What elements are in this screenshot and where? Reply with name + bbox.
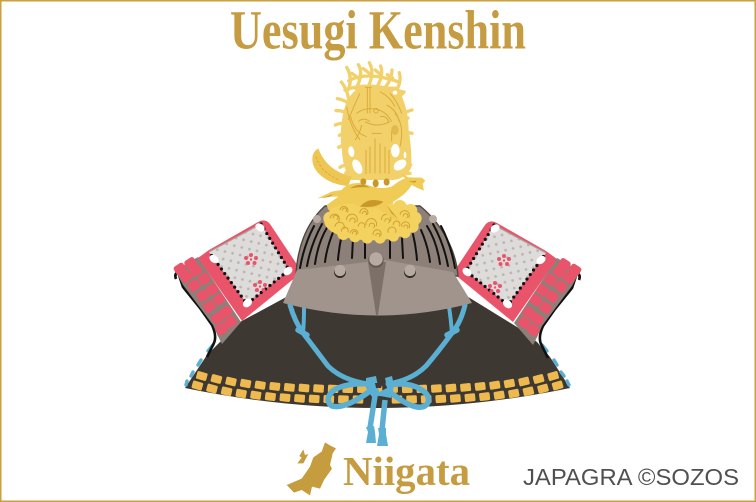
bow centre: [366, 376, 394, 398]
visor rivets: [334, 252, 416, 278]
tassels: [366, 426, 388, 446]
crest flame strands: [335, 63, 412, 176]
cloud base: [323, 197, 422, 244]
tail shading: [316, 157, 340, 181]
flap patterned panel: [208, 222, 294, 309]
knot opening: [375, 383, 383, 388]
cord bow knot: [328, 376, 429, 446]
horse: [317, 173, 425, 222]
crest ovals: [360, 178, 390, 187]
bow tails: [370, 396, 385, 430]
flap red frame: [198, 220, 302, 321]
golden crest: [312, 63, 425, 244]
helmet dome: [296, 206, 458, 276]
crest body: [341, 86, 411, 180]
visor: [283, 260, 472, 316]
right side flap: [453, 221, 582, 358]
dome ribs: [300, 224, 455, 268]
flap red squares: [173, 256, 238, 336]
bow loops: [328, 384, 370, 407]
mainland shape: [287, 442, 336, 495]
prefecture name: Niigata: [343, 448, 470, 494]
horse shading: [321, 181, 417, 218]
crest figure details: [347, 87, 402, 174]
flower emblem lower: [253, 280, 267, 292]
helmet neck guard: [185, 295, 570, 408]
Niigata map icon: [287, 442, 336, 495]
flap black edge: [175, 272, 215, 357]
crest shield: [391, 125, 399, 135]
flower emblem upper: [244, 253, 258, 265]
cloud swirls: [330, 206, 410, 237]
Sado island: [297, 449, 308, 463]
blue lacing edge: [186, 345, 569, 385]
flap lacing band: [175, 257, 241, 344]
neck guard centre plate: [372, 385, 382, 393]
title: Uesugi Kenshin: [230, 0, 526, 60]
neck guard gold plates, right half: [387, 371, 564, 404]
left side flap: [173, 220, 302, 357]
credit line: JAPAGRA ©SOZOS: [523, 464, 739, 490]
dome rivets: [313, 215, 437, 223]
horse tail: [312, 148, 352, 186]
chin cord: [290, 305, 465, 384]
neck guard gold plates: [191, 371, 368, 404]
visor centre ridge: [368, 262, 386, 315]
crest openings: [347, 91, 408, 175]
